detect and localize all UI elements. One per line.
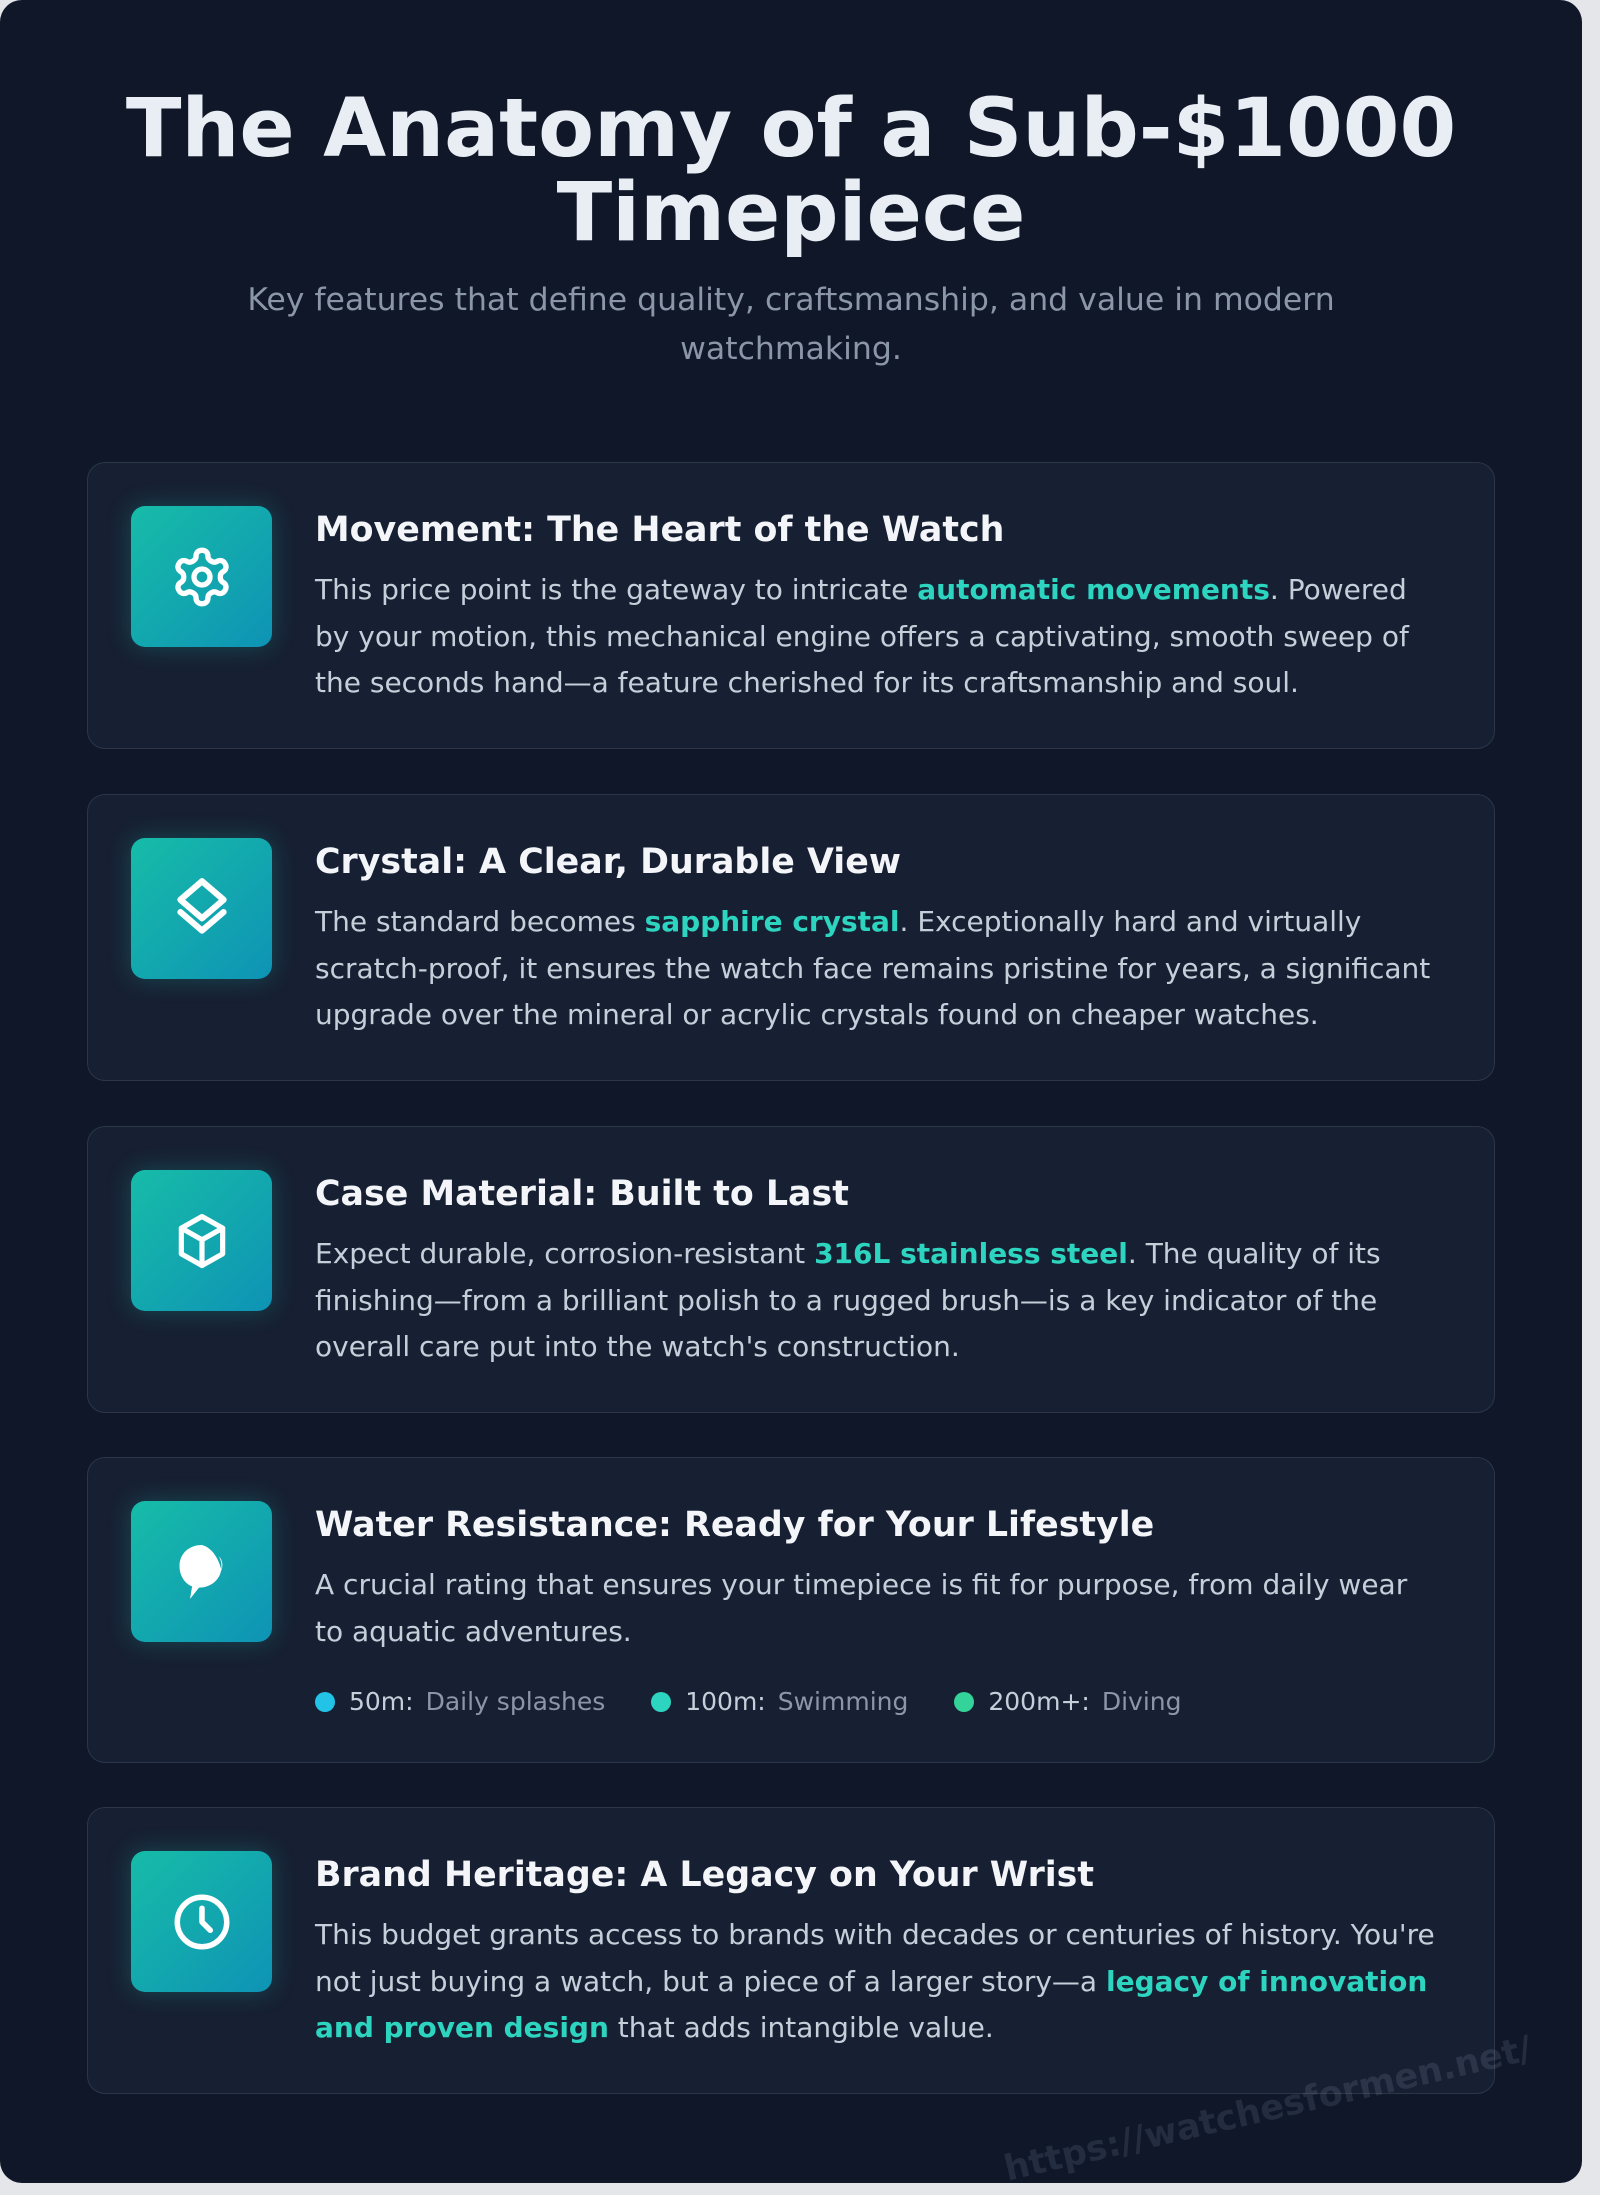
heading: Brand Heritage: A Legacy on Your Wrist <box>315 1855 1094 1895</box>
text block <box>315 1237 1381 1363</box>
text block: scratch-proof, it ensures the watch face remains pristine for years, a significant <box>315 952 1430 984</box>
text block <box>314 1918 1435 2044</box>
legend: depth ratings <box>315 1687 1181 1716</box>
text block: not just buying a watch, but a piece of a larger story—a legacy of innovation <box>315 1964 1427 1998</box>
panel: crystal <box>87 794 1495 1081</box>
text block: This budget grants access to brands with decades or centuries of history. You're <box>315 1918 1435 1951</box>
text block: the seconds hand—a feature cherished for its craftsmanship and soul. <box>315 666 1299 699</box>
icon: layers <box>131 838 272 979</box>
legend: depth ratings: Daily splashes <box>426 1687 605 1716</box>
text block: A crucial rating that ensures your timepiece is fit for purpose, from daily wear <box>315 1568 1407 1601</box>
title <box>126 81 1456 260</box>
panel: brand heritage <box>87 1807 1495 2094</box>
subtitle: Key features that define quality, craftsmanship, and value in modern <box>247 282 1335 318</box>
title: Timepiece <box>557 165 1025 260</box>
text block: by your motion, this mechanical engine offers a captivating, smooth sweep of <box>315 620 1409 652</box>
text block: The standard becomes sapphire crystal. Exceptionally hard and virtually <box>315 905 1361 938</box>
text block: to aquatic adventures. <box>315 1614 632 1648</box>
subtitle: watchmaking. <box>680 331 902 367</box>
text block: Expect durable, corrosion-resistant 316L stainless steel. The quality of its <box>315 1237 1381 1270</box>
heading: Case Material: Built to Last <box>315 1174 849 1214</box>
panel: water resistance <box>87 1457 1495 1763</box>
legend: depth ratings: 200m+: <box>988 1687 1090 1716</box>
text block: and proven design that adds intangible value. <box>315 2011 994 2044</box>
panel: movement <box>87 462 1495 749</box>
text block: finishing—from a brilliant polish to a rugged brush—is a key indicator of the <box>315 1284 1377 1316</box>
text block <box>314 905 1430 1031</box>
title: The Anatomy of a Sub-$1000 <box>126 81 1456 176</box>
icon: cube <box>131 1170 272 1311</box>
legend: depth ratings: Swimming <box>778 1687 908 1716</box>
subtitle <box>247 282 1335 367</box>
legend: depth ratings: 100m: <box>685 1687 766 1716</box>
legend: depth ratings: Diving <box>1102 1687 1181 1716</box>
icon: clock <box>131 1851 272 1992</box>
text block <box>315 1568 1408 1648</box>
heading: Crystal: A Clear, Durable View <box>315 842 901 882</box>
heading: Movement: The Heart of the Watch <box>315 510 1004 550</box>
icon: gear <box>131 506 272 647</box>
icon: water drop <box>131 1501 272 1642</box>
text block: overall care put into the watch's construction. <box>315 1330 960 1363</box>
heading: Water Resistance: Ready for Your Lifestyle <box>315 1505 1154 1545</box>
legend: depth ratings: 50m: <box>349 1687 414 1716</box>
panel: case material <box>87 1126 1495 1413</box>
text block <box>314 573 1410 699</box>
text block: This price point is the gateway to intricate automatic movements. Powered <box>315 573 1407 606</box>
text block: upgrade over the mineral or acrylic crystals found on cheaper watches. <box>315 998 1319 1031</box>
